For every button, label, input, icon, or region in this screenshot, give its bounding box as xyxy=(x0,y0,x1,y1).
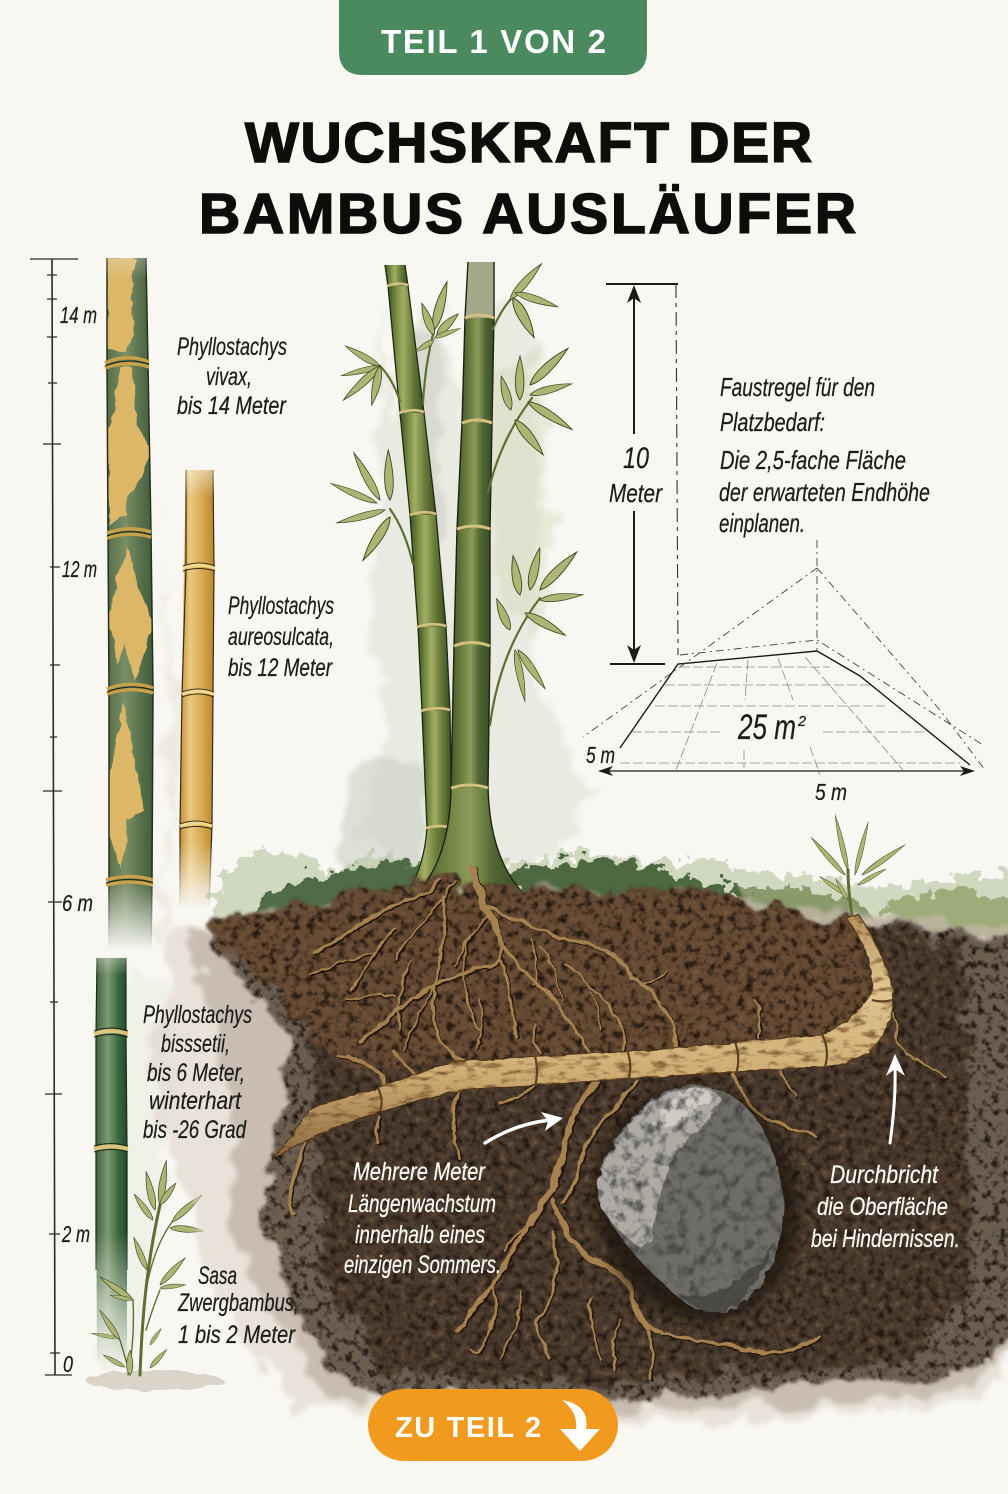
rhizome nodes xyxy=(378,1000,892,1112)
tab: part indicator: TEIL 1 VON 2 xyxy=(381,23,606,60)
labels: bamboo species: Phyllostachys xyxy=(143,1001,252,1029)
ruler labels: 14 m xyxy=(60,302,97,328)
bamboo column: Phyllostachys aureosulcata xyxy=(180,470,215,908)
left culm xyxy=(385,265,452,895)
note: rule of thumb: Die 2,5-fache Fläche xyxy=(720,445,906,475)
ruler labels: 6 m xyxy=(62,890,93,916)
soil note: length growth xyxy=(344,1158,501,1279)
labels: bamboo species: vivax, xyxy=(206,363,252,391)
labels: bamboo species: Phyllostachys xyxy=(177,333,287,361)
area diagram: 25 square meters: 25 m xyxy=(737,708,796,747)
dwarf bamboo: Sasa xyxy=(85,1160,225,1391)
area diagram: 25 square meters: 2 xyxy=(797,713,807,730)
rhizome xyxy=(272,914,893,1160)
area diagram: 25 square meters xyxy=(583,540,985,805)
tab: part indicator xyxy=(339,0,647,75)
ruler labels: 12 m xyxy=(62,556,97,582)
labels: bamboo species: bis 12 Meter xyxy=(228,654,333,682)
labels: bamboo species: bis 6 Meter, xyxy=(147,1059,245,1087)
soil cross-section xyxy=(145,882,1008,1425)
soil note: length growth: innerhalb eines xyxy=(355,1221,485,1249)
icon: curved down arrow xyxy=(560,1400,600,1451)
note: rule of thumb xyxy=(719,372,930,538)
labels: bamboo species: aureosulcata, xyxy=(228,623,334,651)
area diagram: 25 square meters: 5 m xyxy=(815,779,847,805)
roots xyxy=(290,870,947,1379)
soil note: length growth: einzigen Sommers. xyxy=(344,1251,501,1279)
labels: bamboo species: 1 bis 2 Meter xyxy=(178,1321,296,1349)
floor grid xyxy=(620,657,960,775)
arrow: breaks through surface xyxy=(886,1054,905,1143)
soil note: length growth: Mehrere Meter xyxy=(353,1158,486,1186)
note: rule of thumb: einplanen. xyxy=(719,508,805,538)
labels: bamboo species: Phyllostachys xyxy=(228,592,334,620)
labels: bamboo species: bis 14 Meter xyxy=(177,392,287,420)
mist wash behind main bamboo xyxy=(340,300,590,880)
soil note: length growth: Längenwachstum xyxy=(348,1190,496,1218)
button: to part 2: ZU TEIL 2 xyxy=(395,1412,541,1444)
soil note: surface breakthrough: bei Hindernissen. xyxy=(811,1225,960,1253)
width arrow xyxy=(600,770,972,772)
culm outline and nodes xyxy=(107,258,153,950)
dimension: 10 meter height: 10 xyxy=(623,442,649,475)
labels: bamboo species: winterhart xyxy=(149,1087,242,1115)
soil note: surface breakthrough: die Oberfläche xyxy=(817,1193,948,1221)
title xyxy=(199,111,856,246)
labels: bamboo species: bis -26 Grad xyxy=(143,1116,247,1144)
title: WUCHSKRAFT DER xyxy=(245,111,812,175)
button: to part 2 xyxy=(368,1389,618,1461)
main bamboo culms xyxy=(330,261,583,895)
ruler labels: 2 m xyxy=(61,1221,90,1247)
title: BAMBUS AUSLÄUFER xyxy=(199,182,856,246)
ruler labels: 0 xyxy=(63,1351,73,1377)
labels: bamboo species: Sasa xyxy=(198,1262,237,1290)
note: rule of thumb: Platzbedarf: xyxy=(720,407,825,437)
bamboo column: Phyllostachys bissetii xyxy=(94,958,128,1365)
dimension: 10 meter height xyxy=(606,284,678,664)
wash behind columns xyxy=(100,480,180,1370)
labels: bamboo species xyxy=(143,333,334,1349)
branches and leaves xyxy=(330,261,583,725)
dimension: 10 meter height: Meter xyxy=(609,478,663,508)
height ruler xyxy=(30,259,97,1377)
ground foliage xyxy=(210,850,1008,945)
bamboo column: Phyllostachys vivax xyxy=(105,258,153,950)
emerging shoot xyxy=(810,815,906,915)
area diagram: 25 square meters: 5 m xyxy=(586,742,615,768)
labels: bamboo species: Zwergbambus, xyxy=(177,1289,299,1317)
soil note: surface breakthrough: Durchbricht xyxy=(830,1161,939,1189)
boulder xyxy=(575,1068,819,1340)
labels: bamboo species: bisssetii, xyxy=(161,1030,230,1058)
soil note: surface breakthrough xyxy=(811,1161,960,1253)
yellow patches xyxy=(105,258,153,868)
solid outline xyxy=(620,651,970,765)
arrow: rhizome growth xyxy=(485,1112,563,1143)
note: rule of thumb: der erwarteten Endhöhe xyxy=(719,477,930,507)
right culm xyxy=(415,262,525,895)
ruler labels xyxy=(60,302,97,1377)
dashed projection xyxy=(583,540,985,770)
note: rule of thumb: Faustregel für den xyxy=(720,372,875,402)
